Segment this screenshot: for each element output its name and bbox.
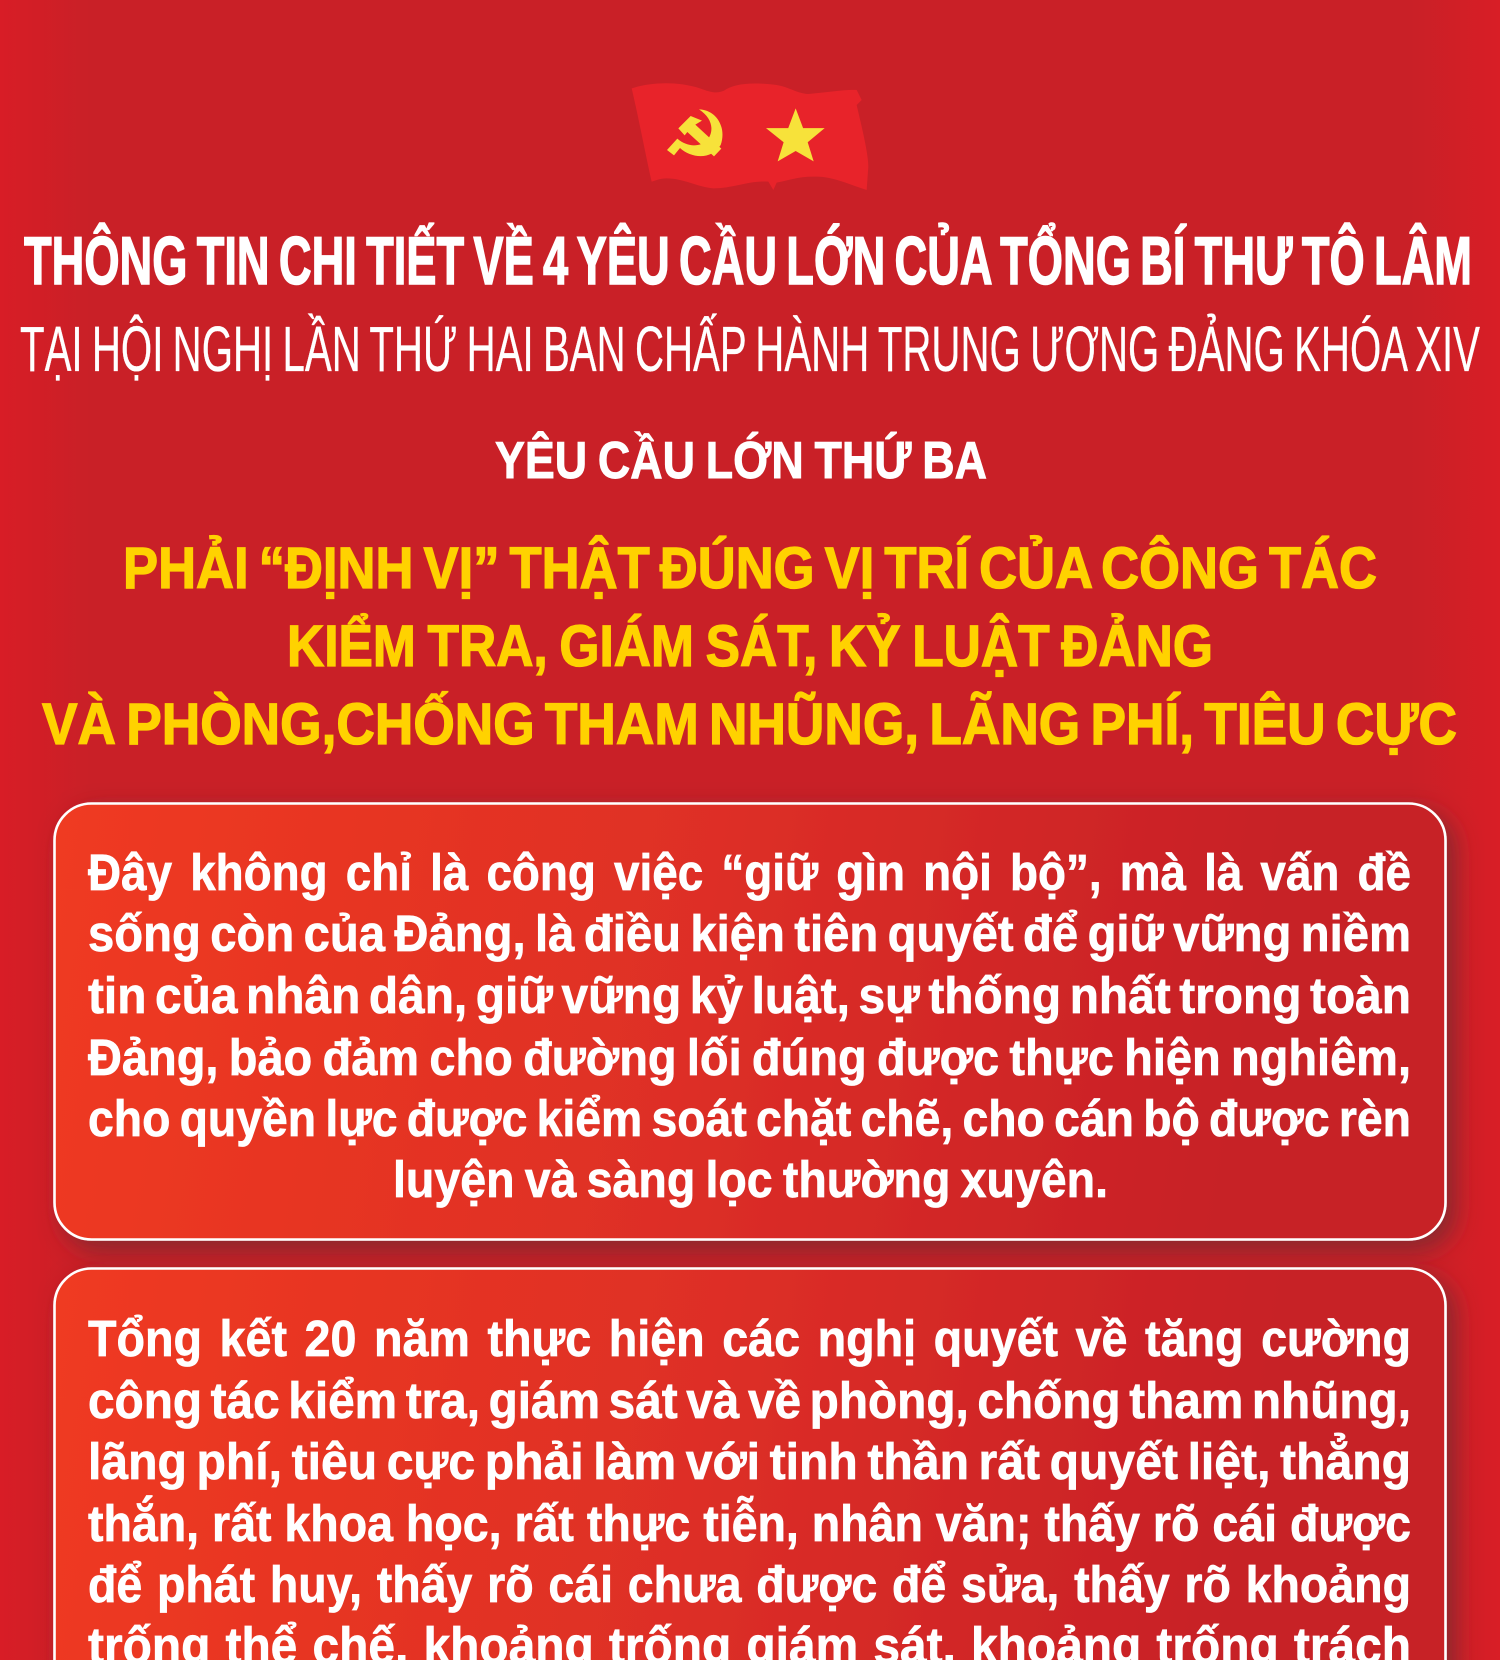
panel text: Đảng, bảo đảm cho đường lối đúng được thực hiện nghiêm, (88, 1029, 1411, 1086)
panel text: Tổng kết 20 năm thực hiện các nghị quyết về tăng cường (88, 1310, 1411, 1367)
panel text: sống còn của Đảng, là điều kiện tiên quyết để giữ vững niềm (88, 905, 1411, 962)
panel: first statement (54, 804, 1446, 1240)
panel text: công tác kiểm tra, giám sát và về phòng, chống tham nhũng, (88, 1372, 1411, 1429)
flag cloth (632, 83, 868, 190)
panel text: lãng phí, tiêu cực phải làm với tinh thần rất quyết liệt, thẳng (88, 1432, 1411, 1490)
gold headline: PHẢI “ĐỊNH VỊ” THẬT ĐÚNG VỊ TRÍ CỦA CÔNG TÁC (123, 536, 1377, 601)
panel text (88, 1310, 1411, 1660)
sickle (667, 109, 722, 156)
gold headline: KIỂM TRA, GIÁM SÁT, KỶ LUẬT ĐẢNG (287, 614, 1213, 679)
icon: party and national flag (632, 83, 868, 190)
panel text: thắn, rất khoa học, rất thực tiễn, nhân văn; thấy rõ cái được (88, 1494, 1411, 1552)
panel text (88, 844, 1411, 1208)
panel box (54, 804, 1446, 1240)
panel text: để phát huy, thấy rõ cái chưa được để sửa, thấy rõ khoảng (88, 1556, 1411, 1613)
section heading: YÊU CẦU LỚN THỨ BA (495, 431, 987, 490)
panel text: luyện và sàng lọc thường xuyên. (393, 1151, 1108, 1208)
panel: second statement (54, 1268, 1446, 1660)
star (766, 108, 825, 161)
gold headline (42, 536, 1457, 757)
hammer (678, 116, 721, 156)
panel text: tin của nhân dân, giữ vững kỷ luật, sự thống nhất trong toàn (88, 967, 1411, 1024)
panel box (54, 1268, 1446, 1660)
